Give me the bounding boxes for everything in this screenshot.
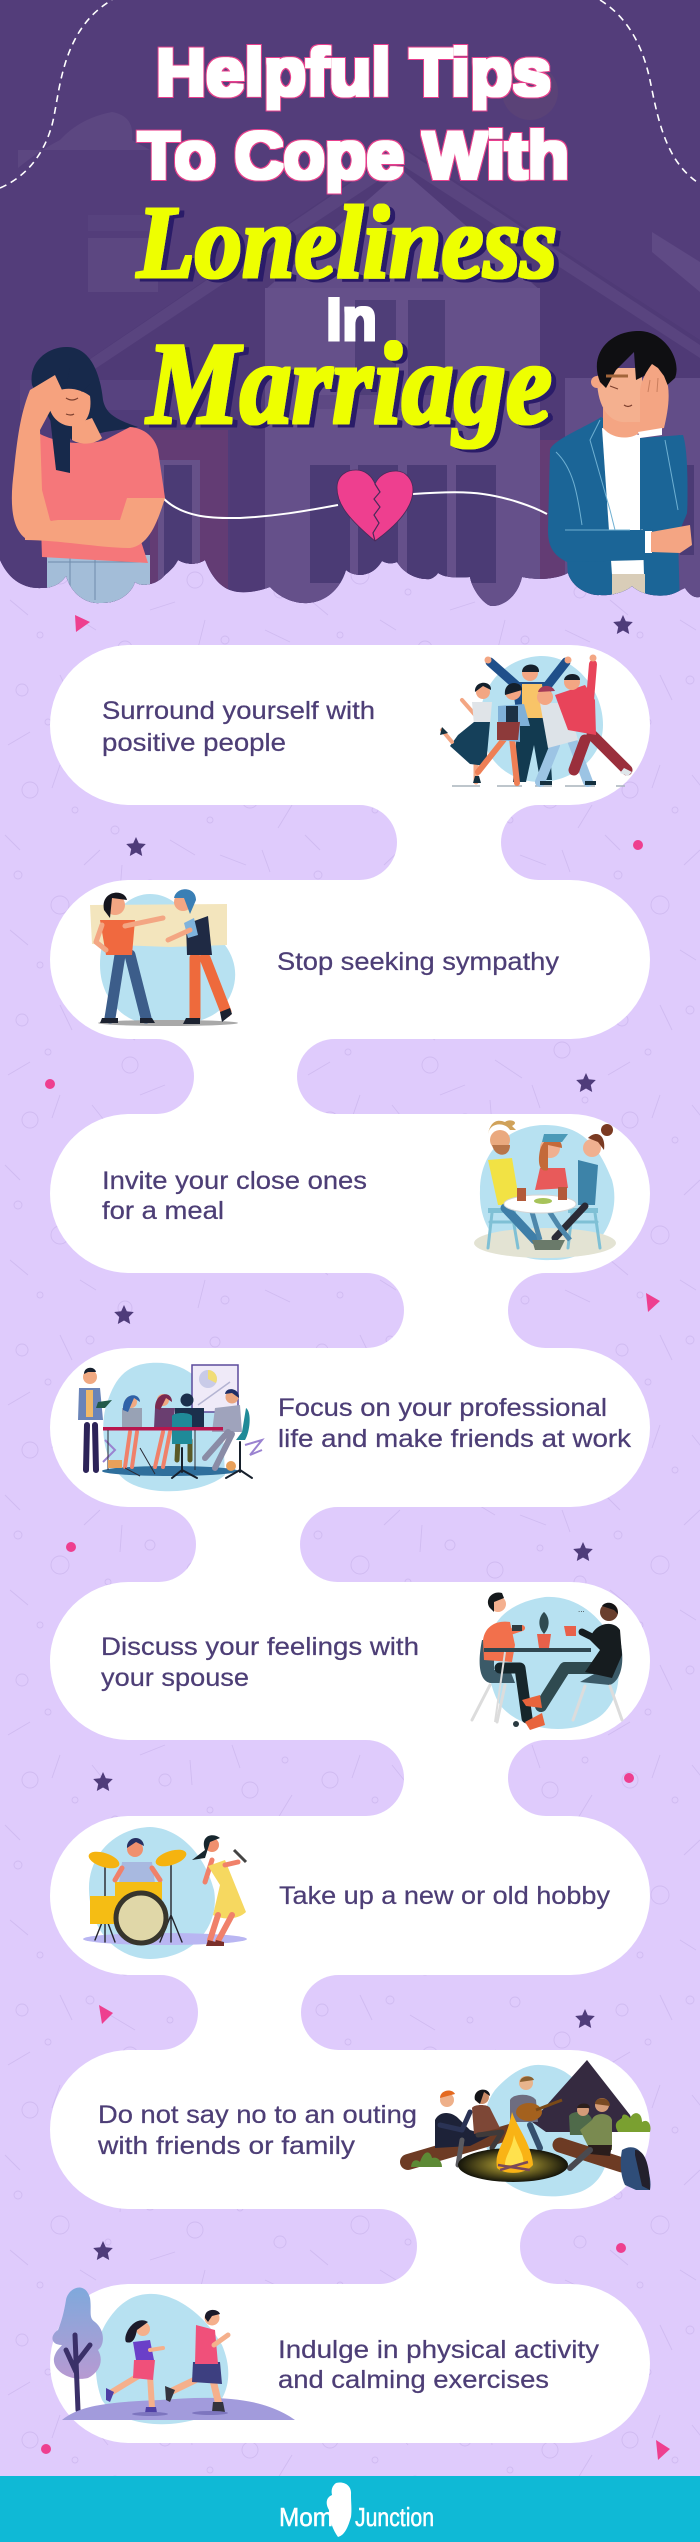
decorative markers: stars, dots and triangles	[41, 615, 670, 2460]
man character	[548, 331, 692, 610]
tip 3 text: Invite your close ones	[102, 1167, 367, 1195]
connecting string left	[163, 498, 338, 518]
panel: tip 2	[50, 880, 650, 1039]
tip 8 text	[278, 2336, 600, 2394]
illustration: campfire with friends	[408, 2060, 651, 2196]
title: In: In	[326, 286, 377, 353]
illustration: couple talking over coffee	[472, 1592, 622, 1730]
title: Helpful Tips: Helpful Tips	[156, 35, 551, 109]
panel: tip 6	[50, 1816, 650, 1975]
tip 5 text: Discuss your feelings with	[101, 1633, 419, 1661]
tip 1 text: positive people	[102, 729, 286, 757]
illustration: couple talking over coffee: ...	[578, 1605, 585, 1614]
panel: tip 5	[50, 1582, 650, 1740]
background house illustration	[0, 64, 700, 610]
panel: tip 4	[50, 1348, 650, 1507]
dashed border right	[600, 0, 700, 184]
tip 1 text: Surround yourself with	[102, 697, 375, 725]
illustration: friends sharing a meal	[474, 1120, 616, 1260]
tip 2 text: Stop seeking sympathy	[277, 948, 560, 976]
illustration: group of friends cheering	[440, 654, 632, 786]
illustration: couple jogging	[52, 2287, 295, 2424]
illustration: arguing couple	[90, 889, 238, 1026]
tip 5 text: your spouse	[101, 1664, 249, 1692]
tip 8 text: and calming exercises	[278, 2366, 549, 2394]
panel: tip 8	[50, 2284, 650, 2443]
tip 1 text	[102, 697, 375, 757]
logo wordmark second part: Junction	[355, 2502, 434, 2532]
icon: broken heart	[337, 470, 413, 541]
tip 4 text: Focus on your professional	[278, 1394, 607, 1422]
icon: mother and child logo	[327, 2483, 351, 2537]
tip 5 text	[101, 1633, 419, 1692]
footer band	[0, 2476, 700, 2542]
panel: tip 1	[50, 645, 650, 805]
illustration: band drummer and singer	[83, 1827, 247, 1959]
tip 8 text: Indulge in physical activity	[278, 2336, 600, 2364]
tip 7 text: Do not say no to an outing	[98, 2101, 417, 2129]
tip 4 text: life and make friends at work	[278, 1425, 632, 1453]
illustration: office meeting	[78, 1363, 262, 1491]
tip 7 text: with friends or family	[97, 2132, 356, 2160]
tip 3 text	[102, 1167, 367, 1225]
panel: tip 3	[50, 1114, 650, 1273]
connecting string right	[413, 492, 547, 514]
logo wordmark: Mom	[279, 2502, 333, 2532]
tip 3 text: for a meal	[102, 1197, 224, 1225]
woman character	[12, 347, 165, 610]
title: To Cope With: To Cope With	[138, 118, 569, 192]
title: Marriage: Marriage	[145, 318, 552, 449]
tip 6 text: Take up a new or old hobby	[279, 1882, 611, 1910]
tip 7 text	[97, 2101, 417, 2160]
panel: tip 7	[50, 2050, 651, 2209]
title: Loneliness: Loneliness	[136, 185, 557, 300]
tip 4 text	[278, 1394, 632, 1453]
dashed border left	[0, 0, 112, 188]
panel: hero header	[0, 0, 700, 610]
